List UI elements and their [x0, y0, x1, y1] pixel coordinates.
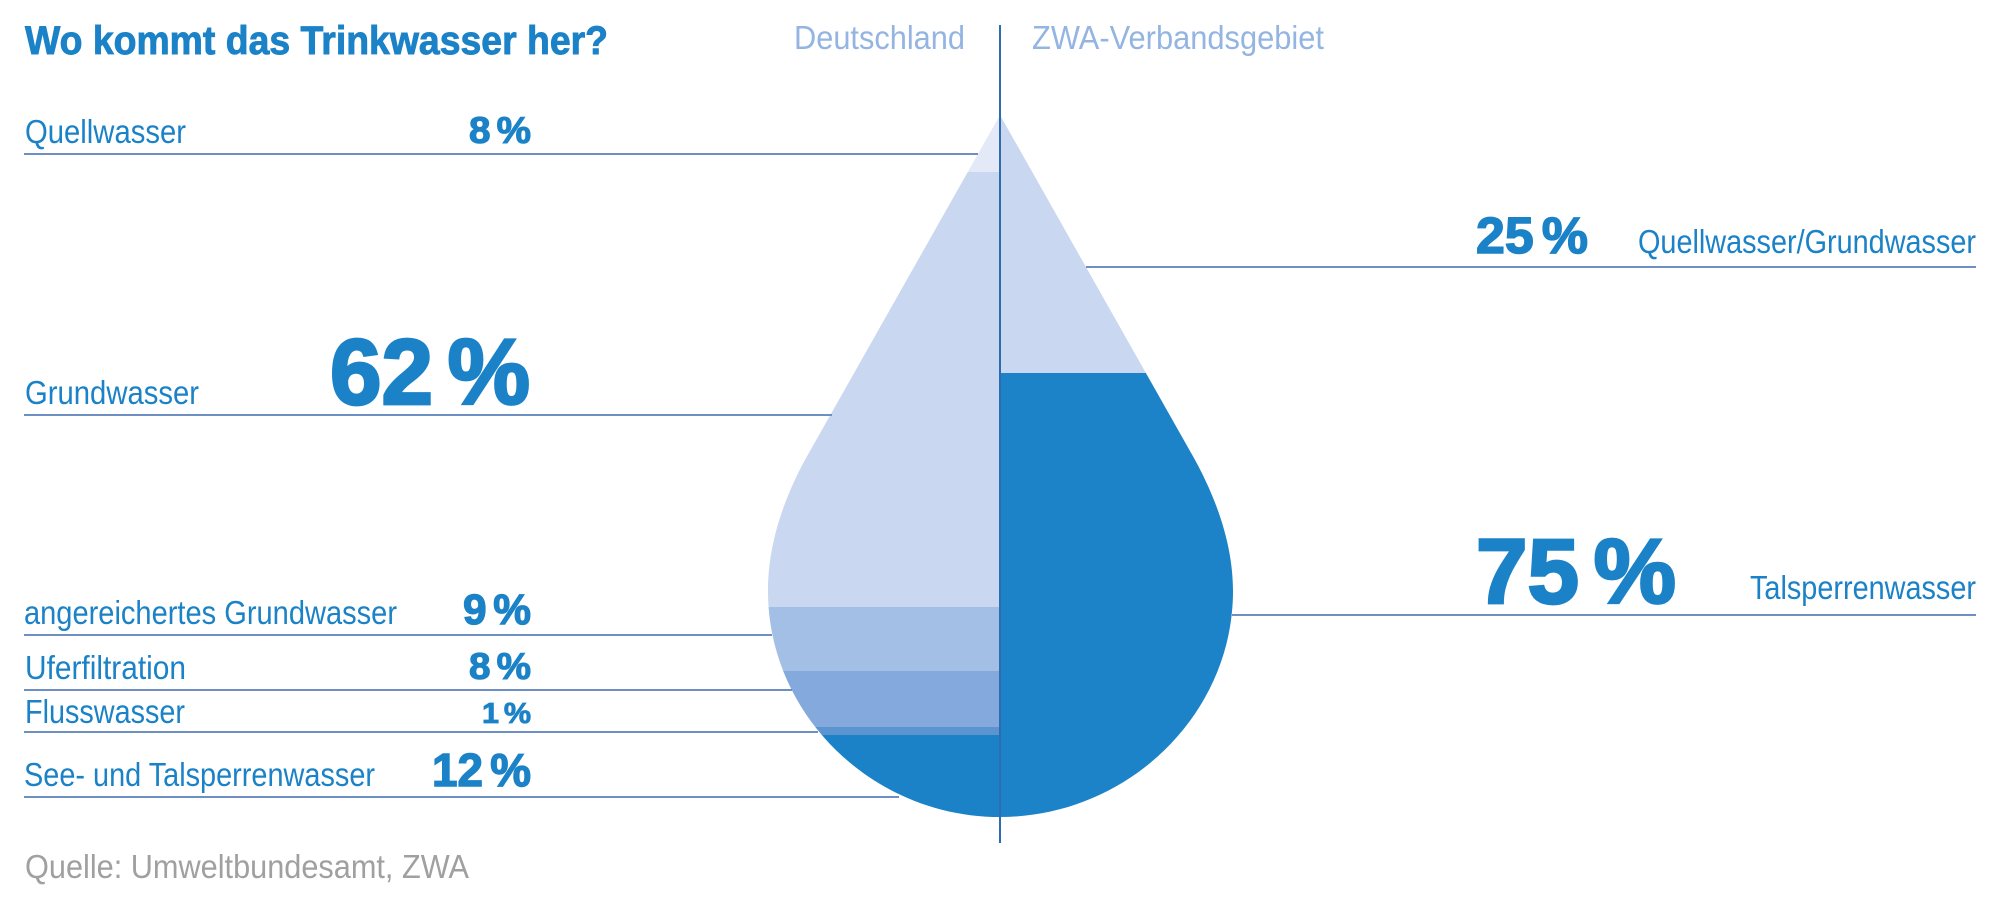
- chart: water drop, ZWA half: [1000, 110, 1240, 820]
- row: 75 % Talsperrenwasser: 75 %: [1476, 521, 1676, 623]
- row: See- und Talsperrenwasser 12 %: 12 %: [432, 744, 531, 796]
- row: angereichertes Grundwasser 9 %: angereichertes Grundwasser: [24, 594, 397, 631]
- row: Flusswasser 1 %: 1 %: [482, 698, 531, 730]
- row: Grundwasser 62 %: Grundwasser: [25, 374, 199, 411]
- row: Grundwasser 62 %: [24, 320, 832, 424]
- source note: Quelle: Umweltbundesamt, ZWA: [25, 848, 469, 885]
- row: Uferfiltration 8 %: [24, 646, 792, 690]
- row: Quellwasser 8 %: [24, 110, 978, 154]
- axis line: [999, 25, 1001, 843]
- row: Flusswasser 1 %: [24, 693, 818, 732]
- row: 75 % Talsperrenwasser: [1232, 521, 1976, 623]
- row: angereichertes Grundwasser 9 %: [24, 586, 772, 635]
- row: Grundwasser 62 %: 62 %: [330, 320, 530, 424]
- heading: Deutschland: Deutschland: [794, 19, 965, 56]
- row: Quellwasser 8 %: 8 %: [469, 110, 531, 151]
- row: 25 % Quellwasser/Grundwasser: 25 %: [1476, 207, 1588, 264]
- row: Flusswasser 1 %: Flusswasser: [25, 693, 185, 730]
- heading: ZWA-Verbandsgebiet: ZWA-Verbandsgebiet: [1032, 19, 1324, 56]
- row: angereichertes Grundwasser 9 %: 9 %: [463, 586, 531, 634]
- row: Uferfiltration 8 %: 8 %: [469, 646, 531, 687]
- row: See- und Talsperrenwasser 12 %: See- und Talsperrenwasser: [24, 756, 375, 793]
- row: Uferfiltration 8 %: Uferfiltration: [25, 649, 186, 686]
- row: See- und Talsperrenwasser 12 %: [24, 744, 899, 797]
- title: Wo kommt das Trinkwasser her?: [25, 19, 608, 63]
- row: Quellwasser 8 %: Quellwasser: [25, 113, 186, 150]
- row: 25 % Quellwasser/Grundwasser: [1086, 207, 1976, 267]
- chart: water drop, Deutschland half: [760, 110, 1000, 820]
